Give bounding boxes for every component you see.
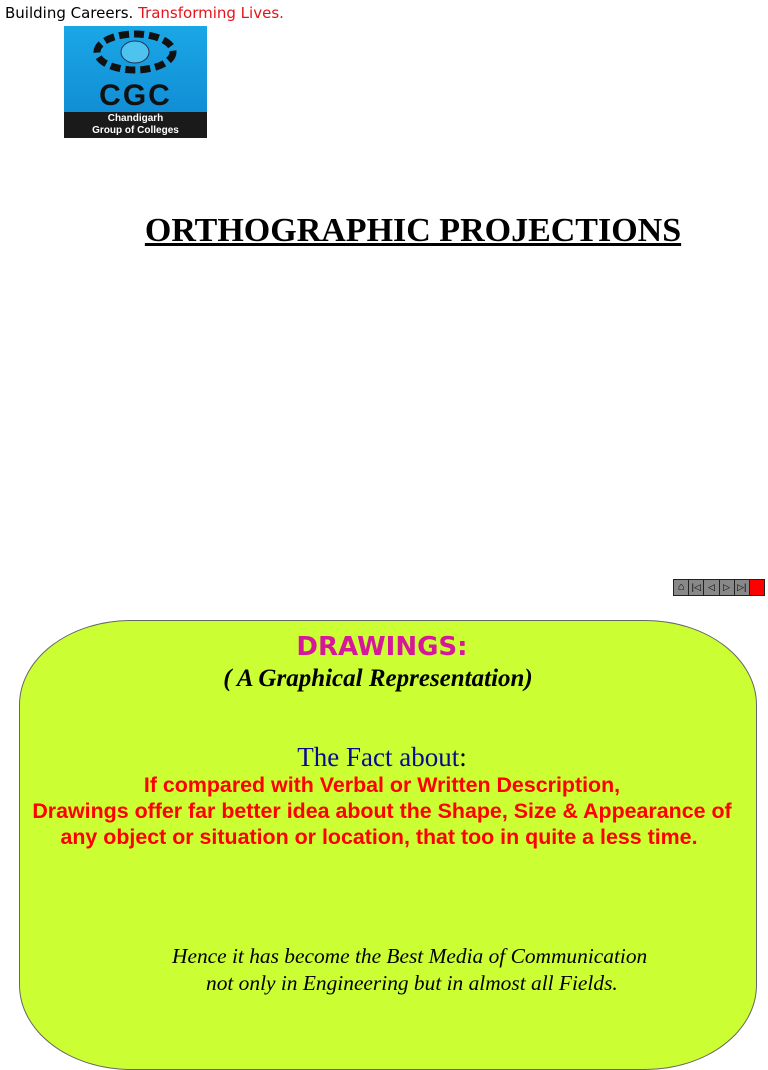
logo caption: Group of Colleges (92, 125, 179, 136)
icon: gear of people (94, 30, 176, 74)
nav buttons: ▷| (737, 582, 746, 592)
nav buttons (673, 579, 765, 596)
text block: red statement: any object or situation or location, that too in quite a less time. (60, 825, 698, 849)
tagline: Building Careers. Transforming Lives. (5, 4, 284, 22)
text block: conclusion: Hence it has become the Best Media of Communication (172, 944, 647, 968)
panel: drawings (19, 620, 757, 1070)
nav buttons: ◁ (708, 582, 715, 592)
title: ORTHOGRAPHIC PROJECTIONS (145, 212, 681, 249)
heading: drawings: DRAWINGS: (296, 632, 468, 662)
nav buttons: |◁ (692, 582, 701, 592)
nav buttons: ⌂ (678, 581, 684, 593)
nav buttons: ▷ (723, 582, 730, 592)
heading: the fact about: The Fact about: (297, 742, 467, 772)
logo caption: Chandigarh (108, 113, 163, 124)
text block: red statement: Drawings offer far better idea about the Shape, Size & Appearance of (32, 799, 732, 823)
text block: red statement: If compared with Verbal or Written Description, (144, 773, 620, 797)
text block: conclusion: not only in Engineering but in almost all Fields. (206, 971, 618, 995)
text block: red statement (32, 773, 732, 849)
logo caption (64, 112, 207, 139)
logo (64, 26, 207, 138)
text block: conclusion (172, 944, 647, 995)
subheading: ( A Graphical Representation) (223, 665, 533, 692)
logo text CGC: CGC (99, 79, 172, 112)
